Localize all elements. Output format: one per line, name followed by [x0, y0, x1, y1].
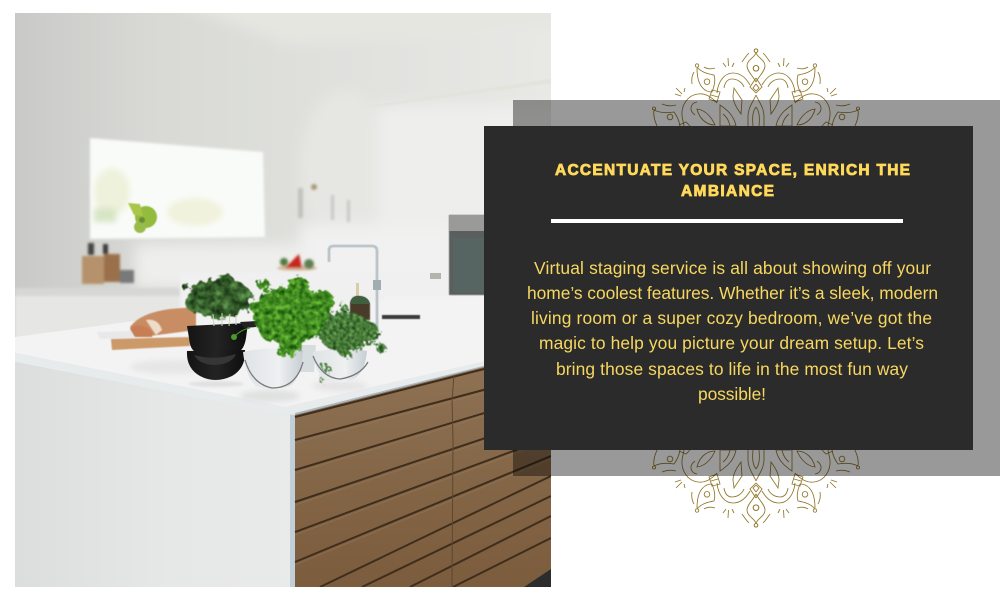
- body paragraph: magic to help you picture your dream setup. Let’s: [539, 333, 924, 353]
- body paragraph: Virtual staging service is all about showing off your: [534, 258, 931, 278]
- divider bar: [551, 219, 903, 223]
- mandala ornament: [652, 49, 860, 527]
- back counter and cabinets: [15, 272, 451, 341]
- cutting board and bread: [97, 307, 196, 350]
- basil stems: [213, 313, 236, 326]
- herb: dill: [318, 304, 386, 382]
- white bowl behind: [299, 345, 316, 372]
- herb: basil: [182, 274, 252, 318]
- black pots: [187, 321, 257, 380]
- body paragraph: possible!: [698, 384, 766, 404]
- utensil holder on back counter: [82, 243, 134, 284]
- wood slatted drawers: [295, 350, 551, 587]
- body paragraph: home’s coolest features. Whether it’s a sleek, modern: [527, 283, 938, 303]
- translucent gray band: [513, 100, 1000, 476]
- kitchen background: [15, 13, 551, 415]
- faucet, bottle and sink: [329, 246, 420, 326]
- herb: parsley: [249, 276, 334, 357]
- dark text panel: [484, 126, 973, 450]
- heading: [555, 162, 910, 200]
- stray herb sprig: [231, 328, 250, 340]
- hanging utensils: [298, 184, 350, 222]
- island counter top: [15, 311, 484, 415]
- photo: kitchen island with herbs: [15, 0, 560, 587]
- red bowl: [277, 254, 317, 271]
- heading: AMBIANCE: [681, 183, 774, 200]
- window: [90, 138, 265, 239]
- heading: ACCENTUATE YOUR SPACE, ENRICH THE: [555, 162, 910, 179]
- body paragraph: [527, 258, 938, 404]
- island side panel: [15, 362, 295, 587]
- body paragraph: bring those spaces to life in the most fun way: [556, 359, 908, 379]
- body paragraph: living room or a super cozy bedroom, we’ve got the: [531, 308, 932, 328]
- white buckets: [243, 348, 368, 389]
- oven: [430, 214, 484, 298]
